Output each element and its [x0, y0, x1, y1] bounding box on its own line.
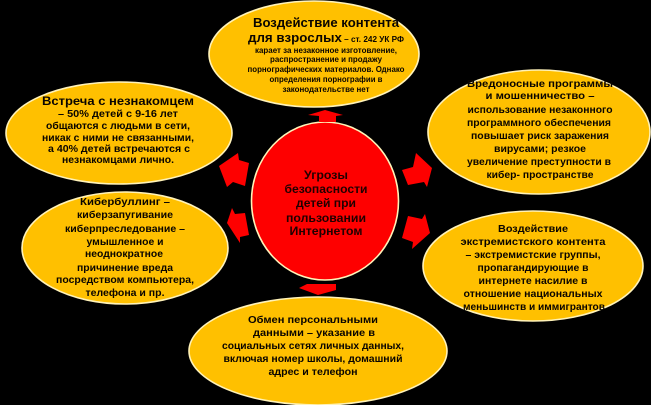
arrow: lower left [227, 208, 249, 243]
panel: adult content [209, 1, 419, 107]
text: extremist content description: отношение национальных [464, 288, 603, 300]
text: malware and fraud description [467, 90, 612, 181]
text: cyberbullying description: неоднократное [85, 248, 163, 260]
text: meeting strangers description: общаются с людьми в сети, [46, 120, 190, 132]
heading: central title: Угрозы [304, 170, 348, 182]
arrow: upper left [219, 153, 249, 187]
arrow: top [308, 110, 343, 122]
panel: extremist content [423, 211, 643, 321]
text: adult content description: распространение и продажу [270, 55, 383, 64]
text: cyberbullying description [56, 209, 194, 299]
heading: meeting strangers: Встреча с незнакомцем [42, 94, 194, 108]
text: extremist content description: экстремистского контента [460, 236, 606, 248]
text: adult content description [248, 30, 405, 94]
text: cyberbullying description: умышленное и [86, 236, 164, 248]
text: sharing personal data description: включая номер школы, домашний [224, 353, 402, 365]
text: malware and fraud description: и мошенничество – [486, 90, 595, 102]
text: adult content description: для взрослых – ст. 242 УК РФ [248, 30, 404, 45]
text: sharing personal data description: данными – указание в [253, 327, 376, 339]
heading: malware and fraud: Вредоносные программы [467, 78, 613, 90]
heading: central title: детей при [296, 198, 356, 210]
text: meeting strangers description: незнакомцами лично. [62, 155, 174, 166]
text: malware and fraud description: программного обеспечения [467, 117, 611, 129]
text: extremist content description: пропагандирующие в [478, 262, 589, 274]
panel: cyberbullying [22, 192, 228, 304]
text: meeting strangers description: – 50% детей с 9-16 лет [58, 109, 178, 120]
arrow: bottom [299, 284, 336, 295]
text: adult content description: карает за незаконное изготовление, [255, 46, 397, 55]
arrow: upper right [402, 153, 432, 187]
text: extremist content description: интернете насилие в [478, 275, 588, 287]
arrow: lower right [402, 214, 430, 249]
panel: malware and fraud [428, 70, 650, 194]
panel: central threat circle [252, 122, 398, 280]
heading: extremist content: Воздействие [498, 223, 568, 235]
text: extremist content description [460, 236, 606, 313]
text: sharing personal data description [222, 327, 404, 378]
text: adult content description: определения порнографии в [270, 75, 383, 84]
heading: central title: пользовании [286, 213, 366, 225]
text: malware and fraud description: использование незаконного [468, 104, 612, 116]
heading: sharing personal data: Обмен персональными [248, 314, 378, 326]
text: cyberbullying description: киберзапугивание [77, 209, 173, 221]
text: cyberbullying description: посредством компьютера, [56, 274, 194, 286]
text: cyberbullying description: киберпреследование – [65, 223, 185, 235]
text: meeting strangers description: никак с ними не связанными, [42, 133, 194, 144]
text: adult content description: законодательстве нет [282, 85, 370, 94]
heading: central title: Интернетом [290, 226, 362, 238]
text: extremist content description: меньшинств и иммигрантов [463, 301, 606, 313]
text: meeting strangers description [42, 109, 194, 166]
heading: central title: безопасности [284, 184, 368, 196]
text: sharing personal data description: социальных сетях личных данных, [222, 340, 404, 352]
text: malware and fraud description: кибер- пространстве [486, 169, 594, 181]
text: sharing personal data description: адрес и телефон [268, 366, 358, 378]
text: malware and fraud description: вирусами; резкое [494, 143, 586, 155]
text: meeting strangers description: а 40% детей встречаются с [48, 144, 190, 155]
text: extremist content description: – экстремистские группы, [466, 249, 601, 261]
text: malware and fraud description: повышает риск заражения [471, 130, 609, 142]
heading: adult content: Воздействие контента [253, 15, 400, 30]
heading: central title [284, 170, 368, 238]
panel: meeting strangers [6, 82, 232, 184]
panel: sharing personal data [189, 297, 447, 405]
text: cyberbullying description: телефона и пр. [86, 287, 165, 299]
text: adult content description: порнографических материалов. Однако [248, 65, 405, 74]
text: cyberbullying description: причинение вреда [77, 262, 173, 274]
heading: cyberbullying: Кибербуллинг – [80, 196, 170, 208]
text: malware and fraud description: увеличение преступности в [467, 156, 612, 168]
